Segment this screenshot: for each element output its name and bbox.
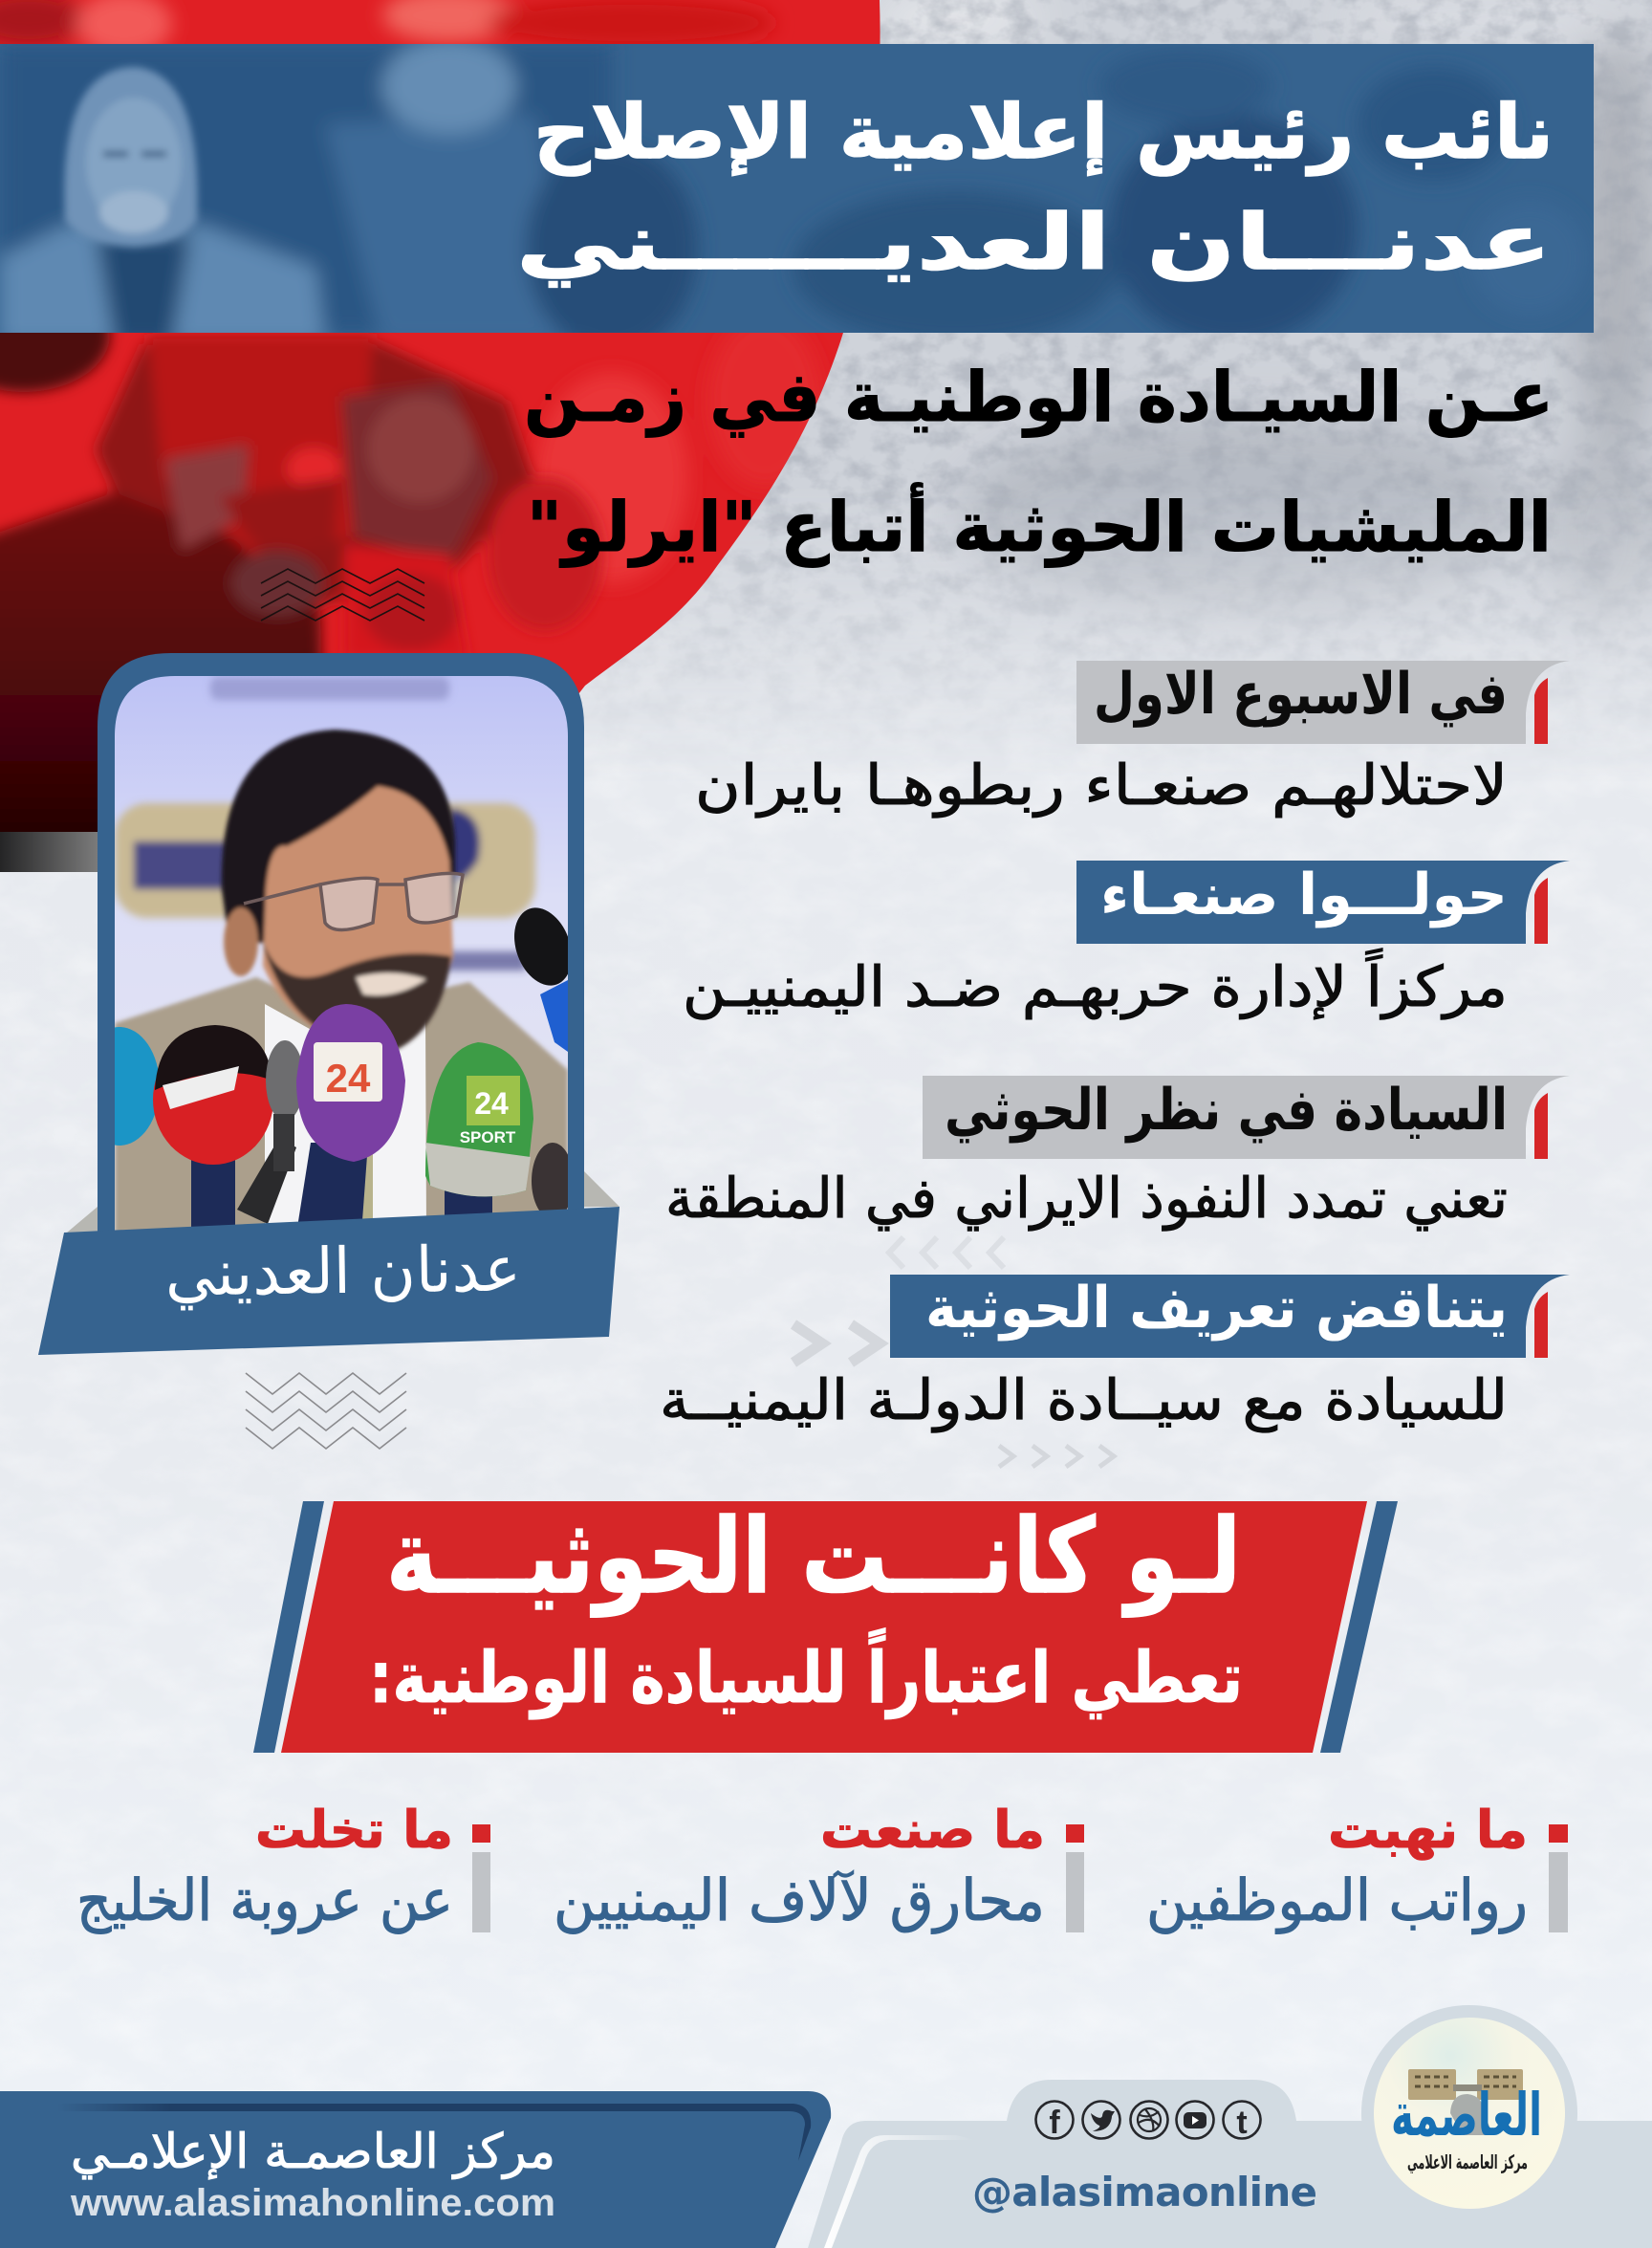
name: عدنان العديني (164, 1232, 521, 1311)
footer website: www.alasimahonline.com (70, 2182, 555, 2224)
chevrons small (999, 1446, 1114, 1467)
column 3: عن عروبة الخليج (76, 1867, 453, 1934)
item 2 tag (1076, 861, 1570, 944)
chevrons left pointing (889, 1237, 1004, 1268)
portrait frame (79, 653, 584, 1233)
logo roof (1450, 2094, 1493, 2135)
item 1 tag: في الاسبوع الاول (1094, 661, 1508, 728)
social handle: @alasimaonline (972, 2169, 1317, 2215)
background crowd photo (535, 0, 1652, 784)
microphone red (153, 1025, 273, 1233)
column 1: رواتب الموظفين (1146, 1867, 1528, 1934)
microphone purple (296, 1004, 405, 1233)
item 3 text: تعني تمدد النفوذ الايراني في المنطقة (665, 1166, 1508, 1232)
icon: youtube (1176, 2102, 1214, 2138)
icon: facebook (1036, 2102, 1073, 2141)
red circle with photo (0, 0, 889, 861)
chevrons right pointing (793, 1324, 880, 1363)
footer blue panel (0, 2091, 831, 2248)
item 4 tag: يتناقض تعريف الحوثية (925, 1275, 1508, 1342)
microphone green: 24 (474, 1086, 509, 1121)
icon: facebook: f (1049, 2105, 1060, 2141)
microphone purple: 24 (326, 1056, 371, 1101)
glasses (244, 873, 463, 929)
logo badge (1361, 2005, 1577, 2221)
title banner (0, 38, 1594, 354)
subtitle line 2: المليشيات الحوثية أتباع "ايرلو" (527, 482, 1552, 568)
item 4 text: للسيادة مع سيــادة الدولـة اليمنيــة (660, 1367, 1508, 1433)
callout line 2: تعطي اعتباراً للسيادة الوطنية: (369, 1627, 1243, 1720)
microphone left blue (115, 1027, 159, 1146)
icon: tumblr: t (1236, 2105, 1248, 2141)
zigzag decoration bottom (246, 1373, 406, 1449)
portrait photo (115, 676, 568, 1230)
column 2: ما صنعت (820, 1800, 1045, 1860)
microphone black (514, 907, 568, 1211)
title line 2: عدنـــان العديــــــني (516, 198, 1552, 287)
zigzag decoration top (261, 569, 424, 621)
social icons (1036, 2102, 1260, 2141)
footer light panel (808, 2080, 1652, 2248)
logo caption: مركز العاصمة الاعلامي (1407, 2150, 1528, 2174)
gray band under circle (0, 832, 98, 872)
item 2 text: مركزاً لإدارة حربهـم ضـد اليمنييـن (683, 948, 1508, 1020)
icon: twitter (1082, 2102, 1120, 2138)
callout line 1: لـو كانـــت الحوثيـــة (386, 1497, 1241, 1618)
microphone green: SPORT (460, 1128, 516, 1146)
item 1 text: لاحتلالهـم صنعـاء ربطوهـا بايران (695, 753, 1508, 818)
column 2: محارق لآلاف اليمنيين (554, 1867, 1045, 1934)
microphone small silver (237, 1040, 304, 1224)
title line 1: نائب رئيس إعلامية الإصلاح (533, 90, 1554, 177)
subtitle line 1: عـن السيـادة الوطنيـة في زمـن (524, 357, 1554, 438)
column 2 (554, 1800, 1084, 1934)
column 3 (76, 1800, 490, 1934)
ribbon folds (67, 1171, 620, 1233)
column 1: ما نهبت (1328, 1800, 1528, 1860)
logo buildings (1408, 2069, 1523, 2100)
callout banner (253, 1497, 1398, 1753)
item 3 tag: السيادة في نظر الحوثي (945, 1077, 1508, 1144)
column 3: ما تخلت (255, 1800, 453, 1860)
item 2 tag: حولـــوا صنعـاء (1100, 862, 1508, 928)
footer org name: مركز العاصمـة الإعلامـي (71, 2124, 555, 2179)
microphone green (425, 1042, 533, 1233)
column 1 (1146, 1800, 1568, 1934)
logo wordmark: العاصمة (1391, 2080, 1542, 2150)
icon: dribbble (1130, 2102, 1168, 2138)
name ribbon (38, 1207, 620, 1355)
icon: tumblr (1224, 2102, 1260, 2141)
